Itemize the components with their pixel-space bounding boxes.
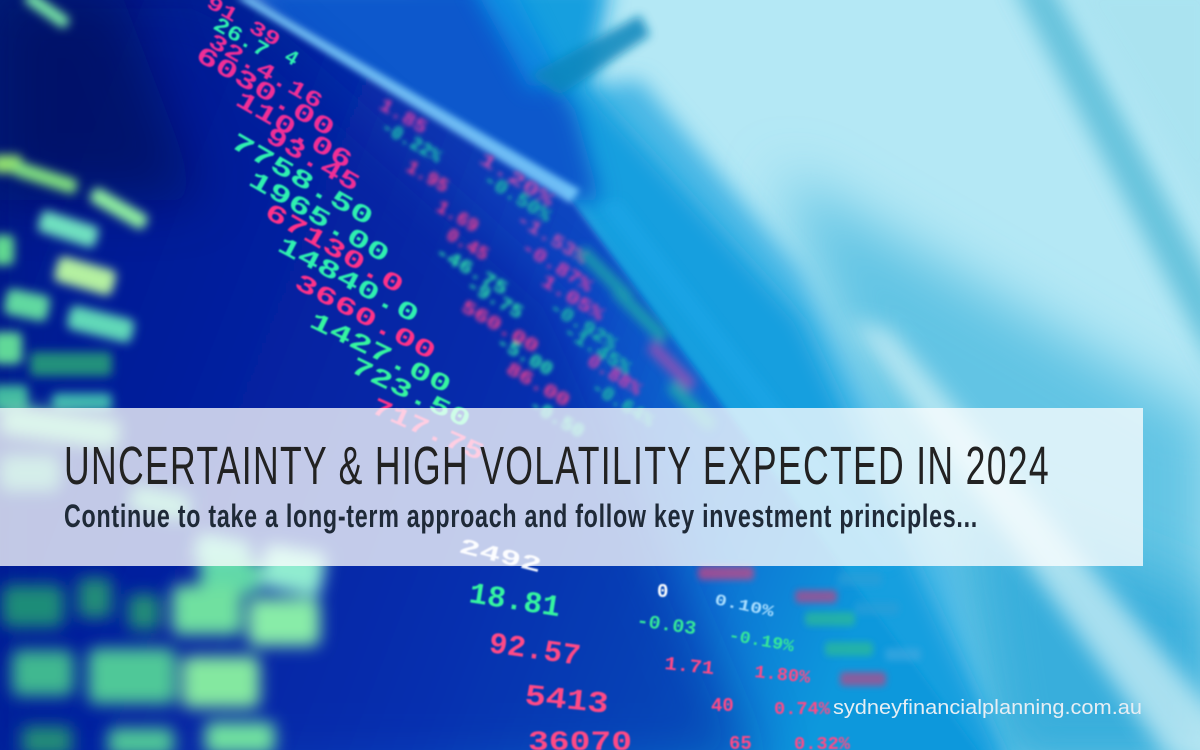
bottom ticker numbers: -0.19% [727, 627, 796, 658]
bottom ticker numbers: 40 [711, 695, 734, 717]
ticker rows: central sharp numbers: 6030.00 [190, 41, 340, 144]
ticker rows: central sharp numbers: 26.7 [208, 14, 272, 64]
bottom ticker numbers: -0.03 [635, 610, 698, 640]
ticker rows: central sharp numbers: 1427.00 [304, 307, 456, 401]
ticker rows: central sharp numbers: 32.4.16 [204, 29, 327, 115]
ticker rows: blurred middle columns: 1.85 [375, 94, 431, 139]
bottom ticker numbers [456, 535, 850, 750]
ticker rows: central sharp numbers: 717.75 [367, 393, 488, 468]
ticker rows: blurred middle columns [375, 94, 658, 443]
bottom ticker numbers: 5413 [523, 680, 610, 723]
ticker rows: central sharp numbers: 7758.50 [225, 128, 378, 233]
ticker rows: blurred middle columns: 1.95 [402, 156, 452, 198]
ticker rows: central sharp numbers: 723.50 [345, 352, 475, 435]
ticker rows: blurred middle columns: 0.88% [583, 350, 646, 401]
bottom ticker numbers: 1.71 [663, 653, 715, 680]
website credit: sydneyfinancialplanning.com.au [833, 697, 1142, 719]
ticker rows: central sharp numbers: 93.45 [260, 122, 365, 199]
bottom ticker numbers: 0 [657, 581, 668, 603]
ticker rows: blurred middle columns: 0.45 [442, 224, 492, 266]
ticker rows: blurred middle columns: -0.92% [545, 296, 621, 356]
lower left: out-of-focus tickers [0, 404, 327, 750]
ticker rows: blurred middle columns: 1.20% [475, 148, 558, 212]
ticker rows: central sharp numbers [190, 0, 488, 468]
bottom ticker numbers: 1.80% [753, 663, 811, 689]
ticker rows: blurred middle columns: -1.53% [512, 208, 592, 270]
bottom ticker numbers: 2492 [456, 535, 544, 579]
ticker rows: blurred middle columns: 1.05% [537, 270, 608, 327]
ticker rows: far blurred green and pink streaks [576, 245, 717, 432]
ticker rows: blurred middle columns: -0.50 [525, 394, 588, 443]
bottom ticker numbers: 0.74% [774, 700, 830, 720]
bottom ticker numbers: 18.81 [466, 578, 563, 626]
ticker rows: blurred middle columns: -5.00 [492, 331, 557, 381]
ticker rows: blurred middle columns: -0.87% [517, 236, 597, 298]
ticker rows: central sharp numbers: 14840.0 [272, 231, 424, 330]
bottom right blurred tickers [698, 566, 921, 686]
ticker rows: blurred middle columns: -0.22% [377, 116, 446, 168]
ticker rows: blurred middle columns: 1.69 [432, 196, 482, 238]
ticker rows: central sharp numbers: 67130.0 [259, 198, 409, 301]
ticker rows: central sharp numbers: 110.06 [230, 86, 357, 176]
translucent banner [0, 408, 1143, 566]
ticker rows: blurred middle columns: 86.00 [502, 358, 574, 412]
ticker rows: blurred middle columns: -0.50% [479, 168, 555, 228]
bottom ticker numbers: 92.57 [487, 628, 582, 675]
ticker rows: blurred middle columns: 560.00 [457, 296, 542, 358]
ticker rows: central sharp numbers: 4 [280, 46, 302, 72]
ticker rows: blurred middle columns: -9.75 [462, 274, 527, 324]
ticker rows: blurred middle columns: -0.64% [587, 376, 658, 433]
left column: out-of-focus green tickers [0, 0, 150, 411]
bottom ticker numbers: 0.10% [713, 591, 776, 621]
ticker rows: central sharp numbers: 3660.00 [289, 268, 441, 367]
ticker rows: blurred middle columns: -1.45% [559, 320, 635, 380]
ticker rows: central sharp numbers: 1965.00 [243, 166, 394, 270]
ticker rows: blurred middle columns: -46.75 [431, 241, 511, 300]
